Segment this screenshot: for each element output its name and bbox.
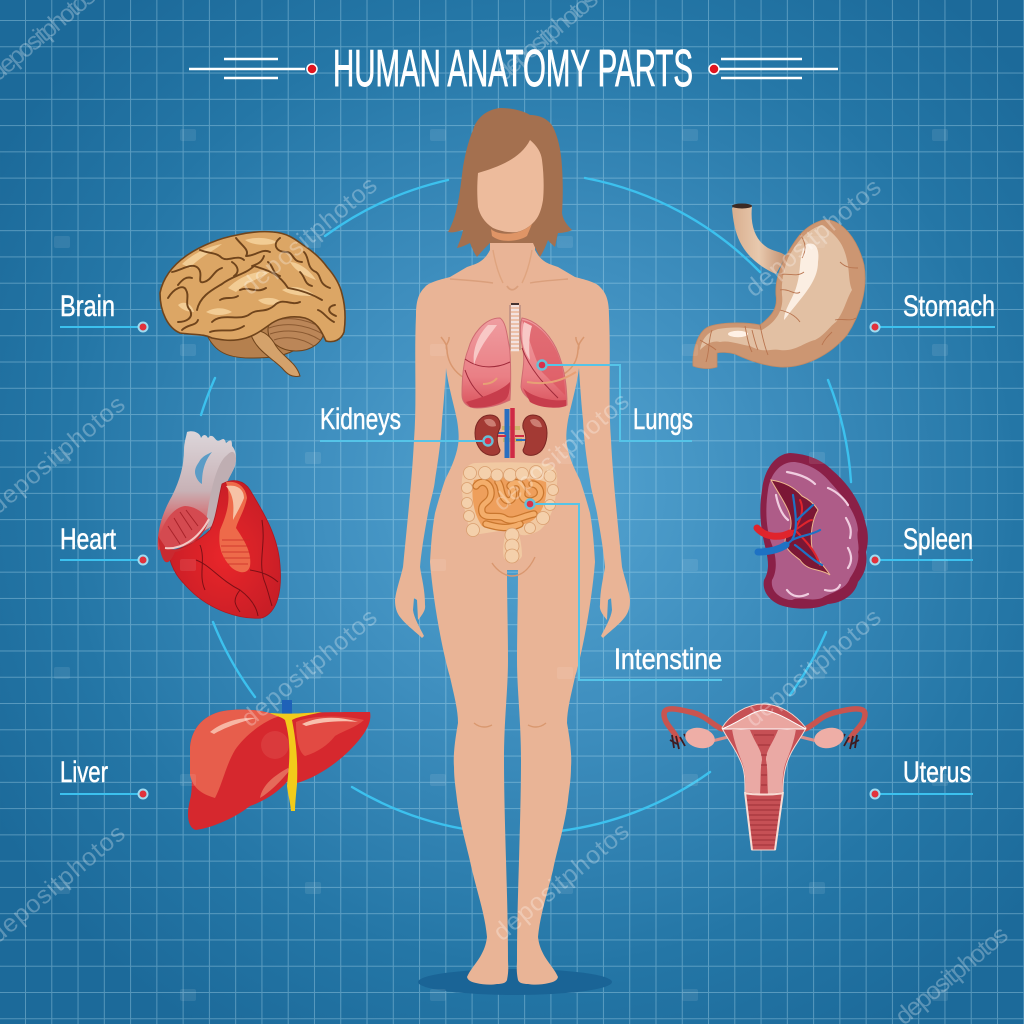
organ: heart bbox=[158, 431, 280, 618]
label: Uterus bbox=[870, 756, 973, 798]
liver light area bbox=[190, 709, 280, 798]
neck shadow bbox=[491, 224, 532, 241]
watermark: depositphotos bbox=[236, 171, 383, 301]
fallopian tubes bbox=[664, 709, 865, 740]
label: Heart: Heart bbox=[60, 523, 117, 556]
label: Uterus: Uterus bbox=[903, 756, 971, 789]
organ: brain bbox=[160, 232, 345, 377]
label: Liver bbox=[60, 756, 148, 798]
title bbox=[189, 40, 838, 98]
trachea bbox=[510, 304, 520, 350]
label: Brain bbox=[60, 290, 148, 332]
cerebrum bbox=[160, 232, 345, 342]
face bbox=[477, 140, 544, 232]
label: Spleen: Spleen bbox=[903, 523, 973, 556]
portal vessel bbox=[282, 700, 292, 714]
hair bbox=[448, 108, 572, 257]
spleen hilum bbox=[771, 480, 830, 575]
stomach highlight bbox=[784, 244, 818, 320]
stomach body outer bbox=[693, 220, 865, 369]
label: Kidneys: Kidneys bbox=[320, 403, 401, 436]
aorta opening bbox=[195, 452, 212, 484]
label: Liver: Liver bbox=[60, 756, 108, 789]
coronary veins bbox=[196, 520, 278, 616]
organ: kidneys on body bbox=[475, 408, 547, 458]
colon haustra bbox=[462, 466, 558, 563]
label: Brain: Brain bbox=[60, 290, 115, 323]
watermark: depositphotos bbox=[488, 387, 635, 517]
watermark camera marks bbox=[54, 129, 948, 1001]
body bbox=[395, 225, 630, 985]
cervix stripes bbox=[746, 735, 782, 845]
ovaries bbox=[712, 736, 817, 741]
label: Intestine bbox=[526, 500, 722, 680]
fimbriae bbox=[670, 734, 859, 749]
figure shadow bbox=[418, 969, 612, 995]
label: Lungs bbox=[538, 360, 693, 441]
circle arcs bbox=[201, 178, 851, 831]
label: Spleen bbox=[870, 523, 973, 564]
organ: stomach bbox=[693, 204, 865, 369]
label: Kidneys bbox=[320, 403, 492, 446]
liver highlights bbox=[210, 718, 256, 734]
vessels bbox=[757, 495, 822, 565]
watermark: depositphotos bbox=[740, 173, 887, 303]
sulci bbox=[168, 238, 336, 332]
right ventricle stripe bbox=[219, 482, 250, 572]
organ: spleen bbox=[757, 453, 868, 609]
label: Stomach: Stomach bbox=[903, 290, 995, 323]
title: HUMAN ANATOMY PARTS bbox=[333, 40, 693, 98]
organ: intestine on body bbox=[462, 462, 558, 563]
label: Stomach bbox=[870, 290, 995, 332]
colon base bbox=[462, 462, 557, 562]
organ: uterus bbox=[664, 704, 865, 850]
left atrium bbox=[158, 506, 209, 550]
heart body bbox=[168, 481, 280, 618]
watermark: depositphotos bbox=[740, 603, 887, 733]
brain stem bbox=[250, 331, 300, 377]
organ: lungs on body bbox=[462, 304, 576, 408]
cerebellum bbox=[268, 309, 324, 351]
spleen highlights bbox=[776, 472, 851, 596]
human figure bbox=[395, 108, 630, 985]
body detail lines bbox=[441, 250, 584, 727]
bile duct bbox=[270, 712, 322, 811]
organ: liver bbox=[188, 700, 370, 830]
label: Heart bbox=[60, 523, 148, 564]
watermark: depositphotos bbox=[488, 817, 635, 947]
esophagus bbox=[732, 205, 786, 274]
lower lobe bbox=[205, 320, 295, 358]
great vessels bbox=[158, 431, 236, 550]
label: Lungs: Lungs bbox=[633, 403, 693, 436]
watermark: depositphotos bbox=[236, 603, 383, 733]
small intestine bbox=[472, 477, 546, 529]
stomach body inner bbox=[700, 225, 852, 350]
brain highlights bbox=[178, 238, 316, 315]
uterus body bbox=[722, 704, 806, 850]
label: Intestine: Intenstine bbox=[614, 643, 722, 676]
